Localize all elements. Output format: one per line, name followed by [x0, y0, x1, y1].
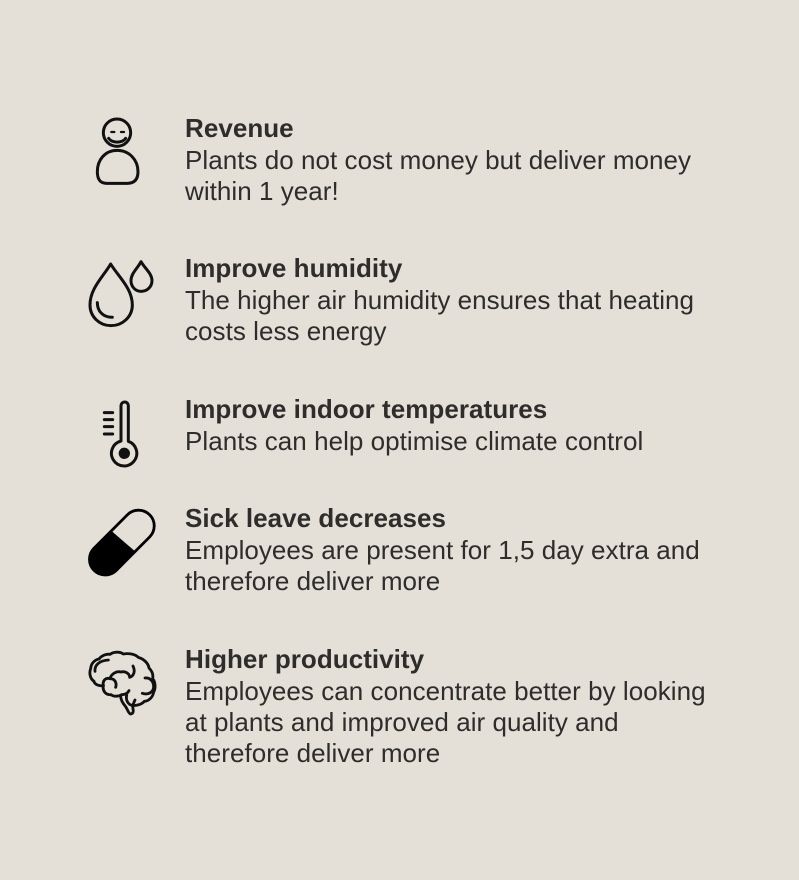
text: higher productivity: therefore deliver more — [185, 738, 440, 768]
text: sick leave decreases — [185, 503, 700, 596]
text: revenue: within 1 year! — [185, 176, 339, 206]
text: improve humidity: Improve humidity — [185, 253, 402, 283]
text: improve humidity: costs less energy — [185, 316, 387, 346]
text: improve indoor temperatures: Plants can help optimise climate control — [185, 426, 643, 456]
text: sick leave decreases: Employees are present for 1,5 day extra and — [185, 535, 700, 565]
text: higher productivity: Higher productivity — [185, 644, 424, 674]
text: sick leave decreases: Sick leave decreases — [185, 503, 446, 533]
text: improve humidity — [185, 253, 694, 346]
text: improve humidity: The higher air humidity ensures that heating — [185, 285, 694, 315]
text: revenue: Plants do not cost money but deliver money — [185, 145, 691, 175]
text: improve indoor temperatures: Improve indoor temperatures — [185, 394, 547, 424]
icon: pill capsule — [88, 508, 156, 576]
text: improve indoor temperatures — [185, 394, 643, 456]
icon: thermometer — [102, 400, 138, 468]
icon: smiling person — [96, 118, 140, 185]
icon: brain — [88, 650, 156, 716]
text: revenue — [185, 113, 691, 206]
text: revenue: Revenue — [185, 113, 294, 143]
text: sick leave decreases: therefore deliver more — [185, 566, 440, 596]
icon: water drops — [88, 260, 154, 328]
text: higher productivity: Employees can concentrate better by looking — [185, 676, 706, 706]
text: higher productivity: at plants and improved air quality and — [185, 707, 619, 737]
text: higher productivity — [185, 644, 706, 768]
